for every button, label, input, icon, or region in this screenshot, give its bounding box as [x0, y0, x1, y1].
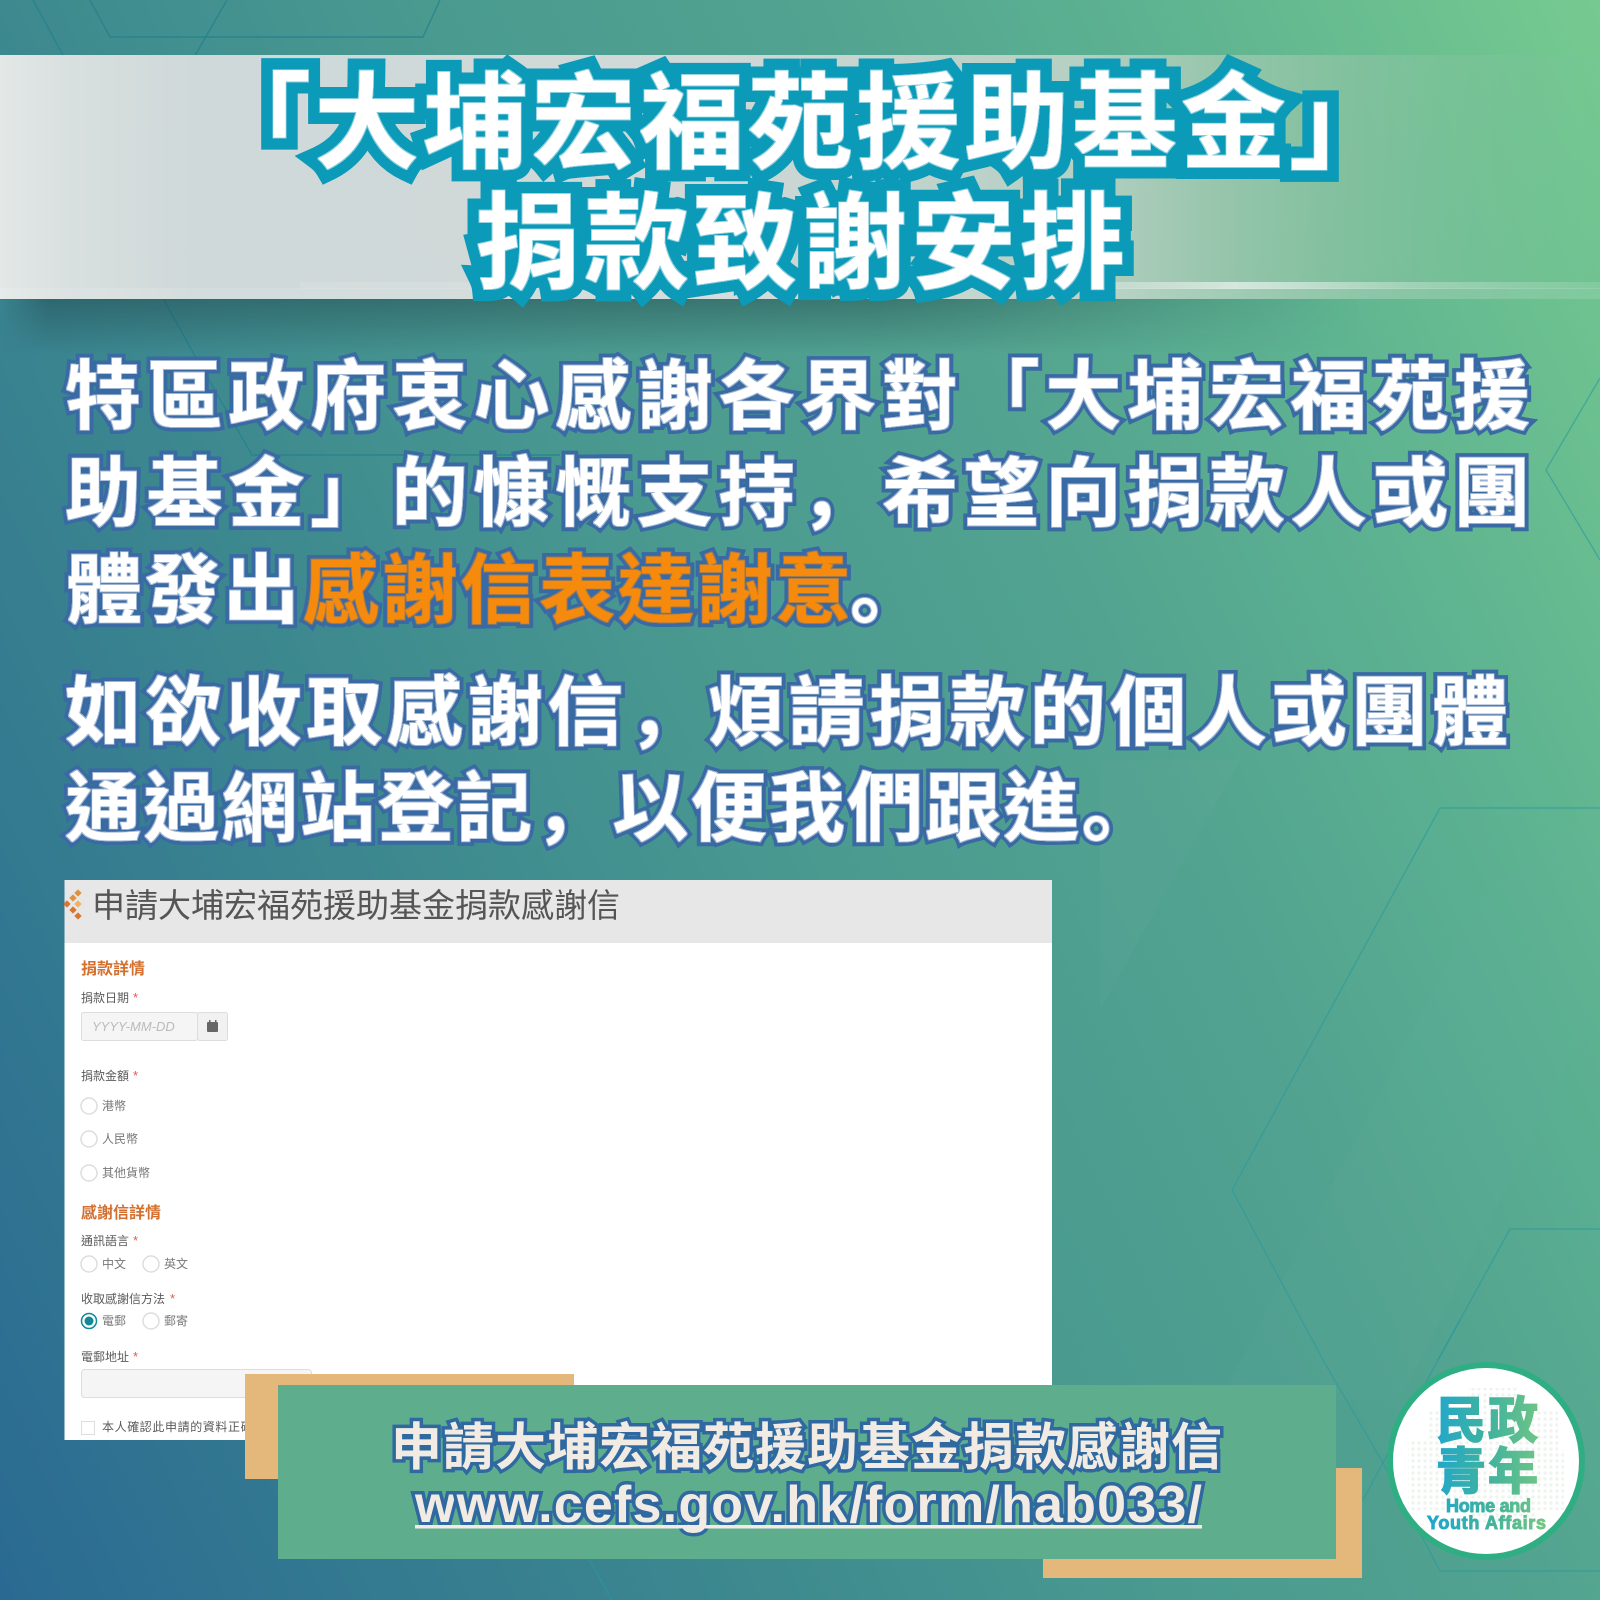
link callout box — [278, 1385, 1336, 1559]
text block: registration paragraph — [65, 651, 1512, 857]
form fields: 人民幣 — [102, 1130, 138, 1147]
logo: Home and Youth Affairs: Youth Affairs — [1427, 1513, 1546, 1533]
logo: Home and Youth Affairs: 青年 — [1436, 1432, 1540, 1504]
text block: registration paragraph: 通過網站登記，以便我們跟進。 — [65, 747, 1160, 857]
text block: thanks paragraph — [65, 335, 1536, 639]
logo: Home and Youth Affairs — [1390, 1365, 1582, 1557]
form fields: * — [133, 1068, 138, 1083]
title band — [0, 55, 1600, 354]
form fields: * — [133, 1349, 138, 1364]
form fields: YYYY-MM-DD — [92, 1019, 175, 1034]
form fields: 其他貨幣 — [102, 1164, 150, 1181]
decorative tan blocks — [245, 1374, 1362, 1578]
title: 捐款致謝安排 — [475, 159, 1129, 311]
form fields: 電郵地址 — [81, 1348, 129, 1365]
form fields: * — [133, 1233, 138, 1248]
form fields — [81, 955, 312, 1435]
text block: thanks paragraph: 。 — [850, 529, 932, 639]
form fields: 電郵 — [102, 1312, 126, 1329]
form fields: 通訊語言 — [81, 1232, 129, 1249]
form fields: * — [170, 1291, 175, 1306]
form fields: 郵寄 — [164, 1312, 188, 1329]
text block: thanks paragraph: 感謝信表達謝意 — [303, 529, 854, 639]
form fields: 收取感謝信方法 — [81, 1290, 165, 1307]
form fields: 捐款金額 — [81, 1067, 129, 1084]
text block: thanks paragraph: 體發出 — [66, 529, 302, 639]
link callout box: 申請大埔宏福苑援助基金捐款感謝信 — [391, 1406, 1223, 1480]
form fields: 港幣 — [102, 1097, 126, 1114]
form header — [63, 879, 1052, 943]
text block: registration paragraph: 如欲收取感謝信，煩請捐款的個人或團體 — [65, 651, 1512, 761]
link callout box: www.cefs.gov.hk/form/hab033/ — [414, 1476, 1202, 1534]
form fields: 英文 — [164, 1255, 188, 1272]
form screenshot panel — [63, 879, 1052, 1440]
text block: thanks paragraph: 特區政府衷心感謝各界對「大埔宏福苑援 — [65, 335, 1536, 445]
logo: Home and Youth Affairs: 民政 — [1436, 1381, 1540, 1453]
form fields: 中文 — [102, 1255, 126, 1272]
form fields: 感謝信詳情 — [81, 1199, 161, 1223]
title: 「大埔宏福苑援助基金」 — [206, 39, 1397, 191]
form header: 申請大埔宏福苑援助基金捐款感謝信 — [92, 879, 620, 927]
logo: Home and Youth Affairs: Home and — [1446, 1496, 1531, 1516]
form fields: * — [133, 990, 138, 1005]
text block: thanks paragraph: 助基金」的慷慨支持，希望向捐款人或團 — [65, 432, 1536, 542]
form fields: 捐款日期 — [81, 989, 129, 1006]
form fields: 本人確認此申請的資料正確 — [102, 1418, 253, 1435]
form fields: 捐款詳情 — [81, 955, 145, 979]
title — [206, 39, 1397, 311]
